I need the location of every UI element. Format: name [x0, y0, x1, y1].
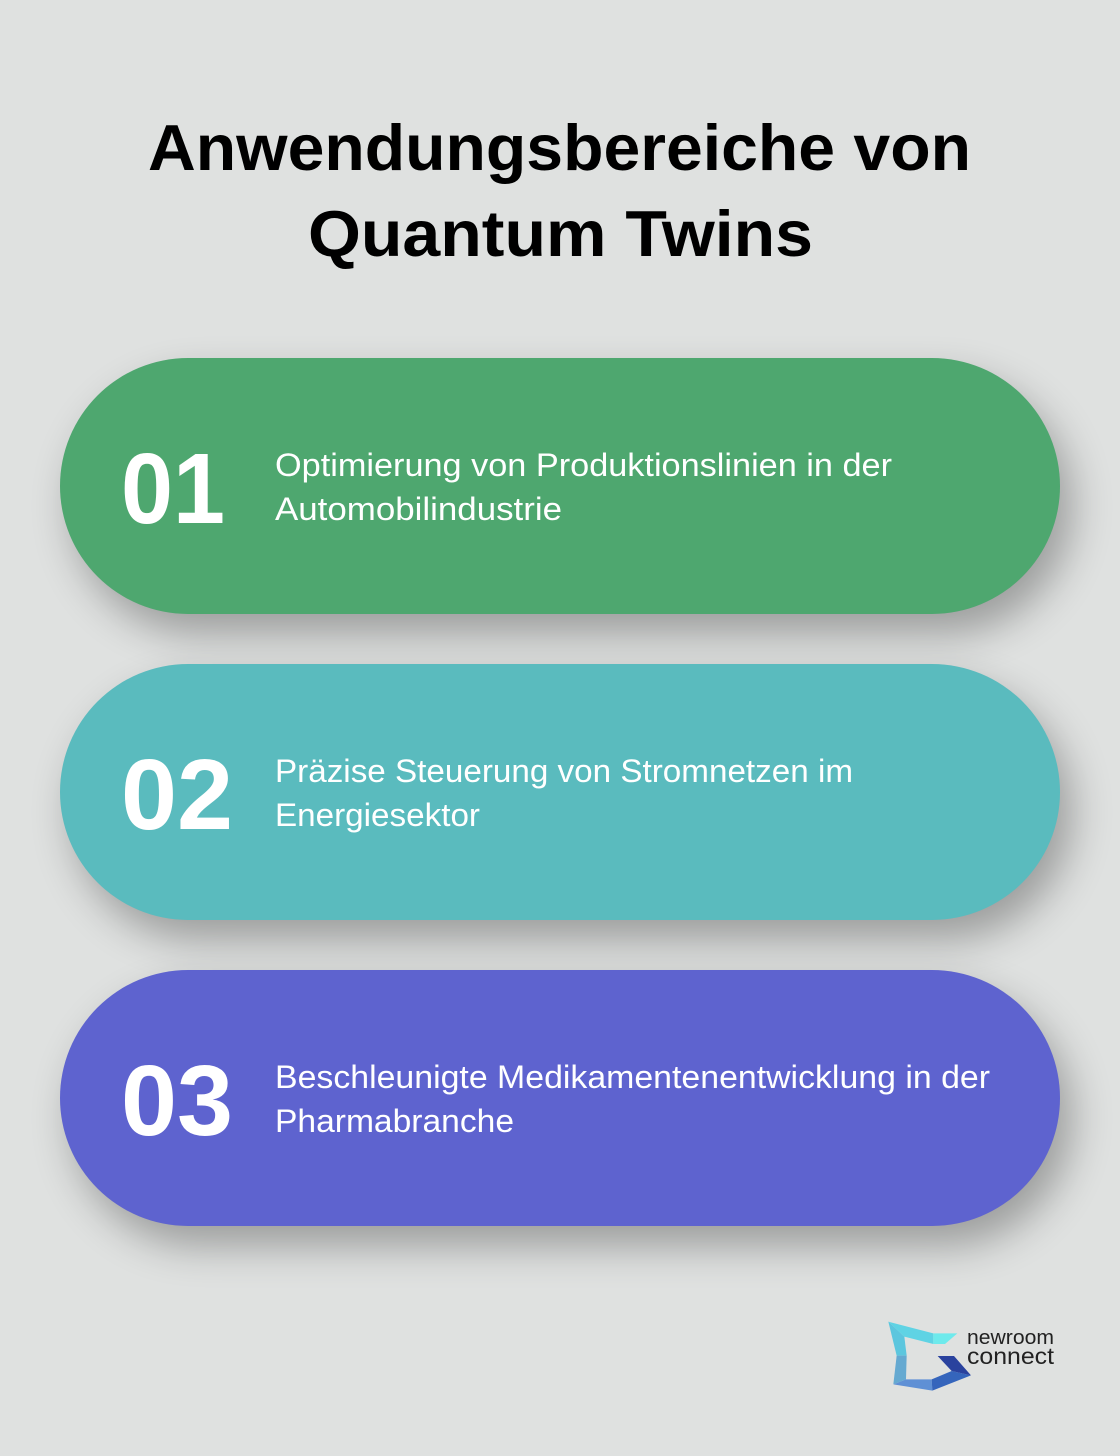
title: [148, 111, 971, 270]
panel: item 03 background: [60, 970, 1060, 1226]
text: logo wordmark: newroom: [967, 1327, 1054, 1349]
number 02: 02: [121, 739, 233, 851]
text: item 01: Automobilindustrie: [275, 491, 562, 527]
panel: item 02 background: [60, 664, 1060, 920]
text: item 03: [275, 1059, 990, 1139]
icon: logo mark: [888, 1322, 971, 1391]
title: Anwendungsbereiche von: [148, 111, 971, 184]
text: logo wordmark: connect: [967, 1343, 1055, 1369]
text: item 02: Energiesektor: [275, 797, 480, 833]
text: item 03: Beschleunigte Medikamentenentwicklung in der: [275, 1059, 990, 1095]
text: logo wordmark: [967, 1327, 1055, 1369]
text: item 03: Pharmabranche: [275, 1103, 514, 1139]
text: item 01: Optimierung von Produktionslinien in der: [275, 447, 892, 483]
number 03: 03: [121, 1045, 233, 1157]
text: item 02: Präzise Steuerung von Stromnetzen im: [275, 753, 853, 789]
text: item 01: [275, 447, 892, 527]
number 01: 01: [121, 433, 225, 545]
logo: newroom connect: [888, 1322, 1055, 1391]
panel: item 01 background: [60, 358, 1060, 614]
title: Quantum Twins: [308, 197, 813, 270]
text: item 02: [275, 753, 853, 833]
